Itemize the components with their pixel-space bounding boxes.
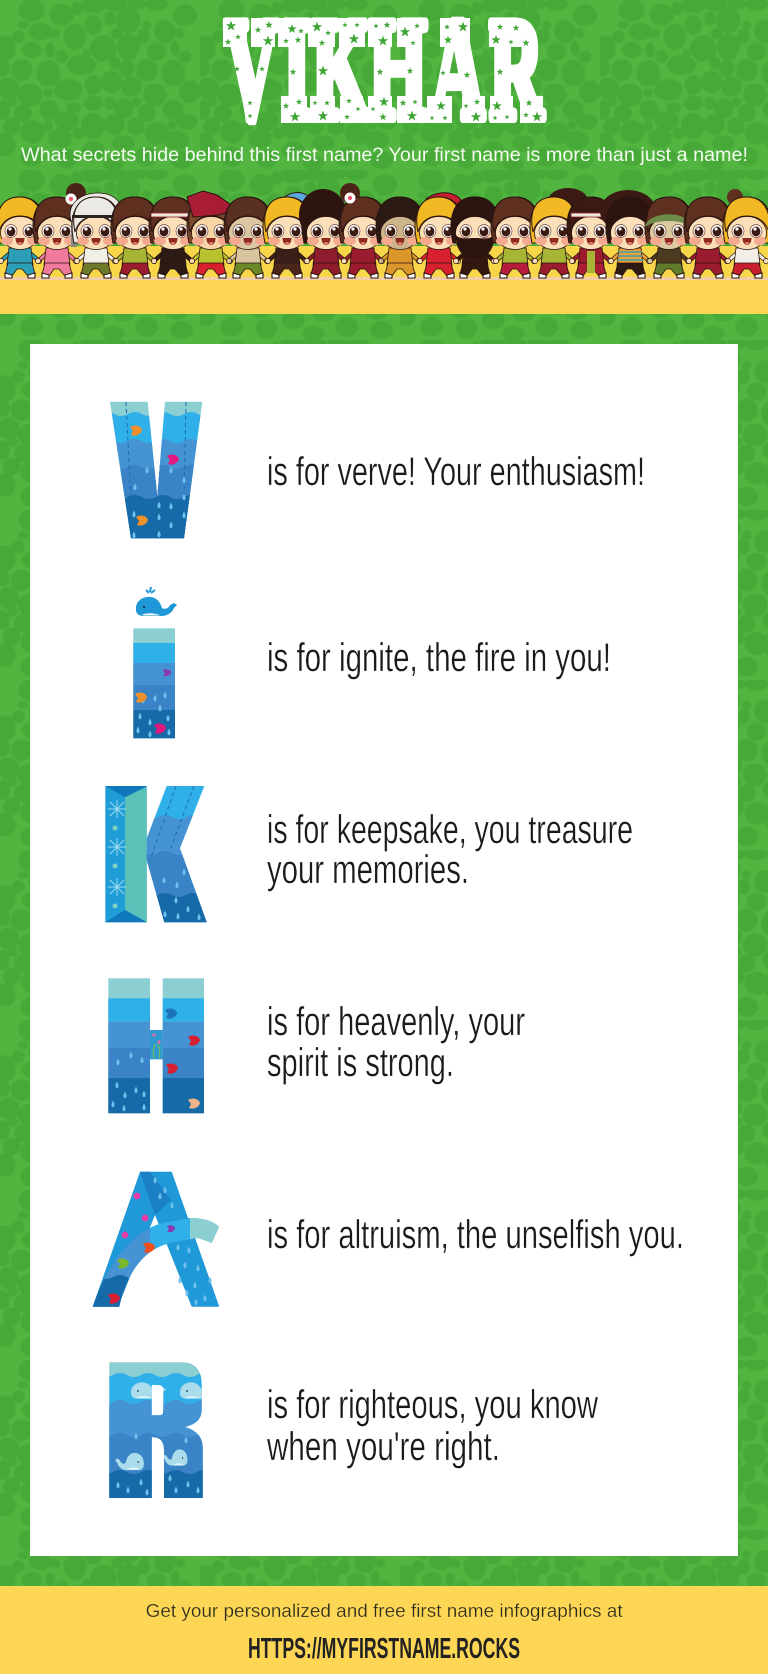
- character: boy with beaded headband in black: [149, 197, 197, 278]
- text: H meaning second line: spirit is strong.: [267, 1041, 454, 1085]
- character: dark-skinned girl in gold: [376, 197, 424, 278]
- text: K meaning: is for keepsake, you treasure: [267, 808, 633, 852]
- icon: letter V: [110, 402, 202, 538]
- character: blond boy in red and white: [723, 189, 768, 278]
- tagline: What secrets hide behind this first name? Your first name is more than just a name!: [21, 145, 748, 166]
- icon: letter K: [105, 786, 207, 922]
- character: girl with beaded band and green apron: [567, 197, 615, 278]
- icon: letter A: [92, 1172, 220, 1307]
- text: H meaning: is for heavenly, your: [267, 1000, 525, 1044]
- character: bearded man in black: [451, 197, 499, 278]
- text: R meaning second line: when you're right.: [266, 1425, 500, 1469]
- banner: yellow strip with crowd of characters: [0, 183, 768, 314]
- icon: letter I with whale: [133, 587, 177, 738]
- panel: white content card: [30, 344, 738, 1556]
- footer url: HTTPS://MYFIRSTNAME.ROCKS: [248, 1633, 520, 1665]
- character: blond boy in blue overalls: [0, 197, 44, 278]
- text: I meaning: is for ignite, the fire in you!: [267, 636, 611, 680]
- character: girl with flower in maroon: [339, 183, 387, 278]
- character: blond boy with red cap in red dress: [415, 193, 464, 278]
- text: R meaning: is for righteous, you know: [267, 1383, 598, 1427]
- character: boy in striped rainbow top: [600, 190, 656, 278]
- character: blond boy in maroon: [530, 188, 588, 278]
- character: boy in maroon with bandage: [684, 197, 732, 278]
- character: blond boy in blue cap: [263, 192, 315, 278]
- icon: whale: [136, 587, 177, 616]
- footer prompt text: Get your personalized and free first name infographics at: [146, 1600, 623, 1621]
- character: boy in white keffiyeh: [70, 193, 122, 278]
- text: K meaning second line: your memories.: [267, 848, 469, 892]
- character: girl in maroon with olive top: [111, 197, 159, 278]
- character: girl in pink kimono: [33, 183, 86, 278]
- footer band: [0, 1586, 768, 1674]
- icon: letter R: [109, 1362, 203, 1498]
- character: boy in tall black hat: [299, 189, 350, 278]
- character: girl in dotted red skirt: [491, 197, 539, 278]
- character: girl in red hat and red skirt: [187, 191, 237, 278]
- icon: letter H: [108, 978, 204, 1113]
- character: girl in green headdress and grass skirt: [645, 197, 693, 278]
- stars on title lettering: [225, 20, 542, 121]
- character: dark-skinned boy in grass skirt: [224, 197, 272, 278]
